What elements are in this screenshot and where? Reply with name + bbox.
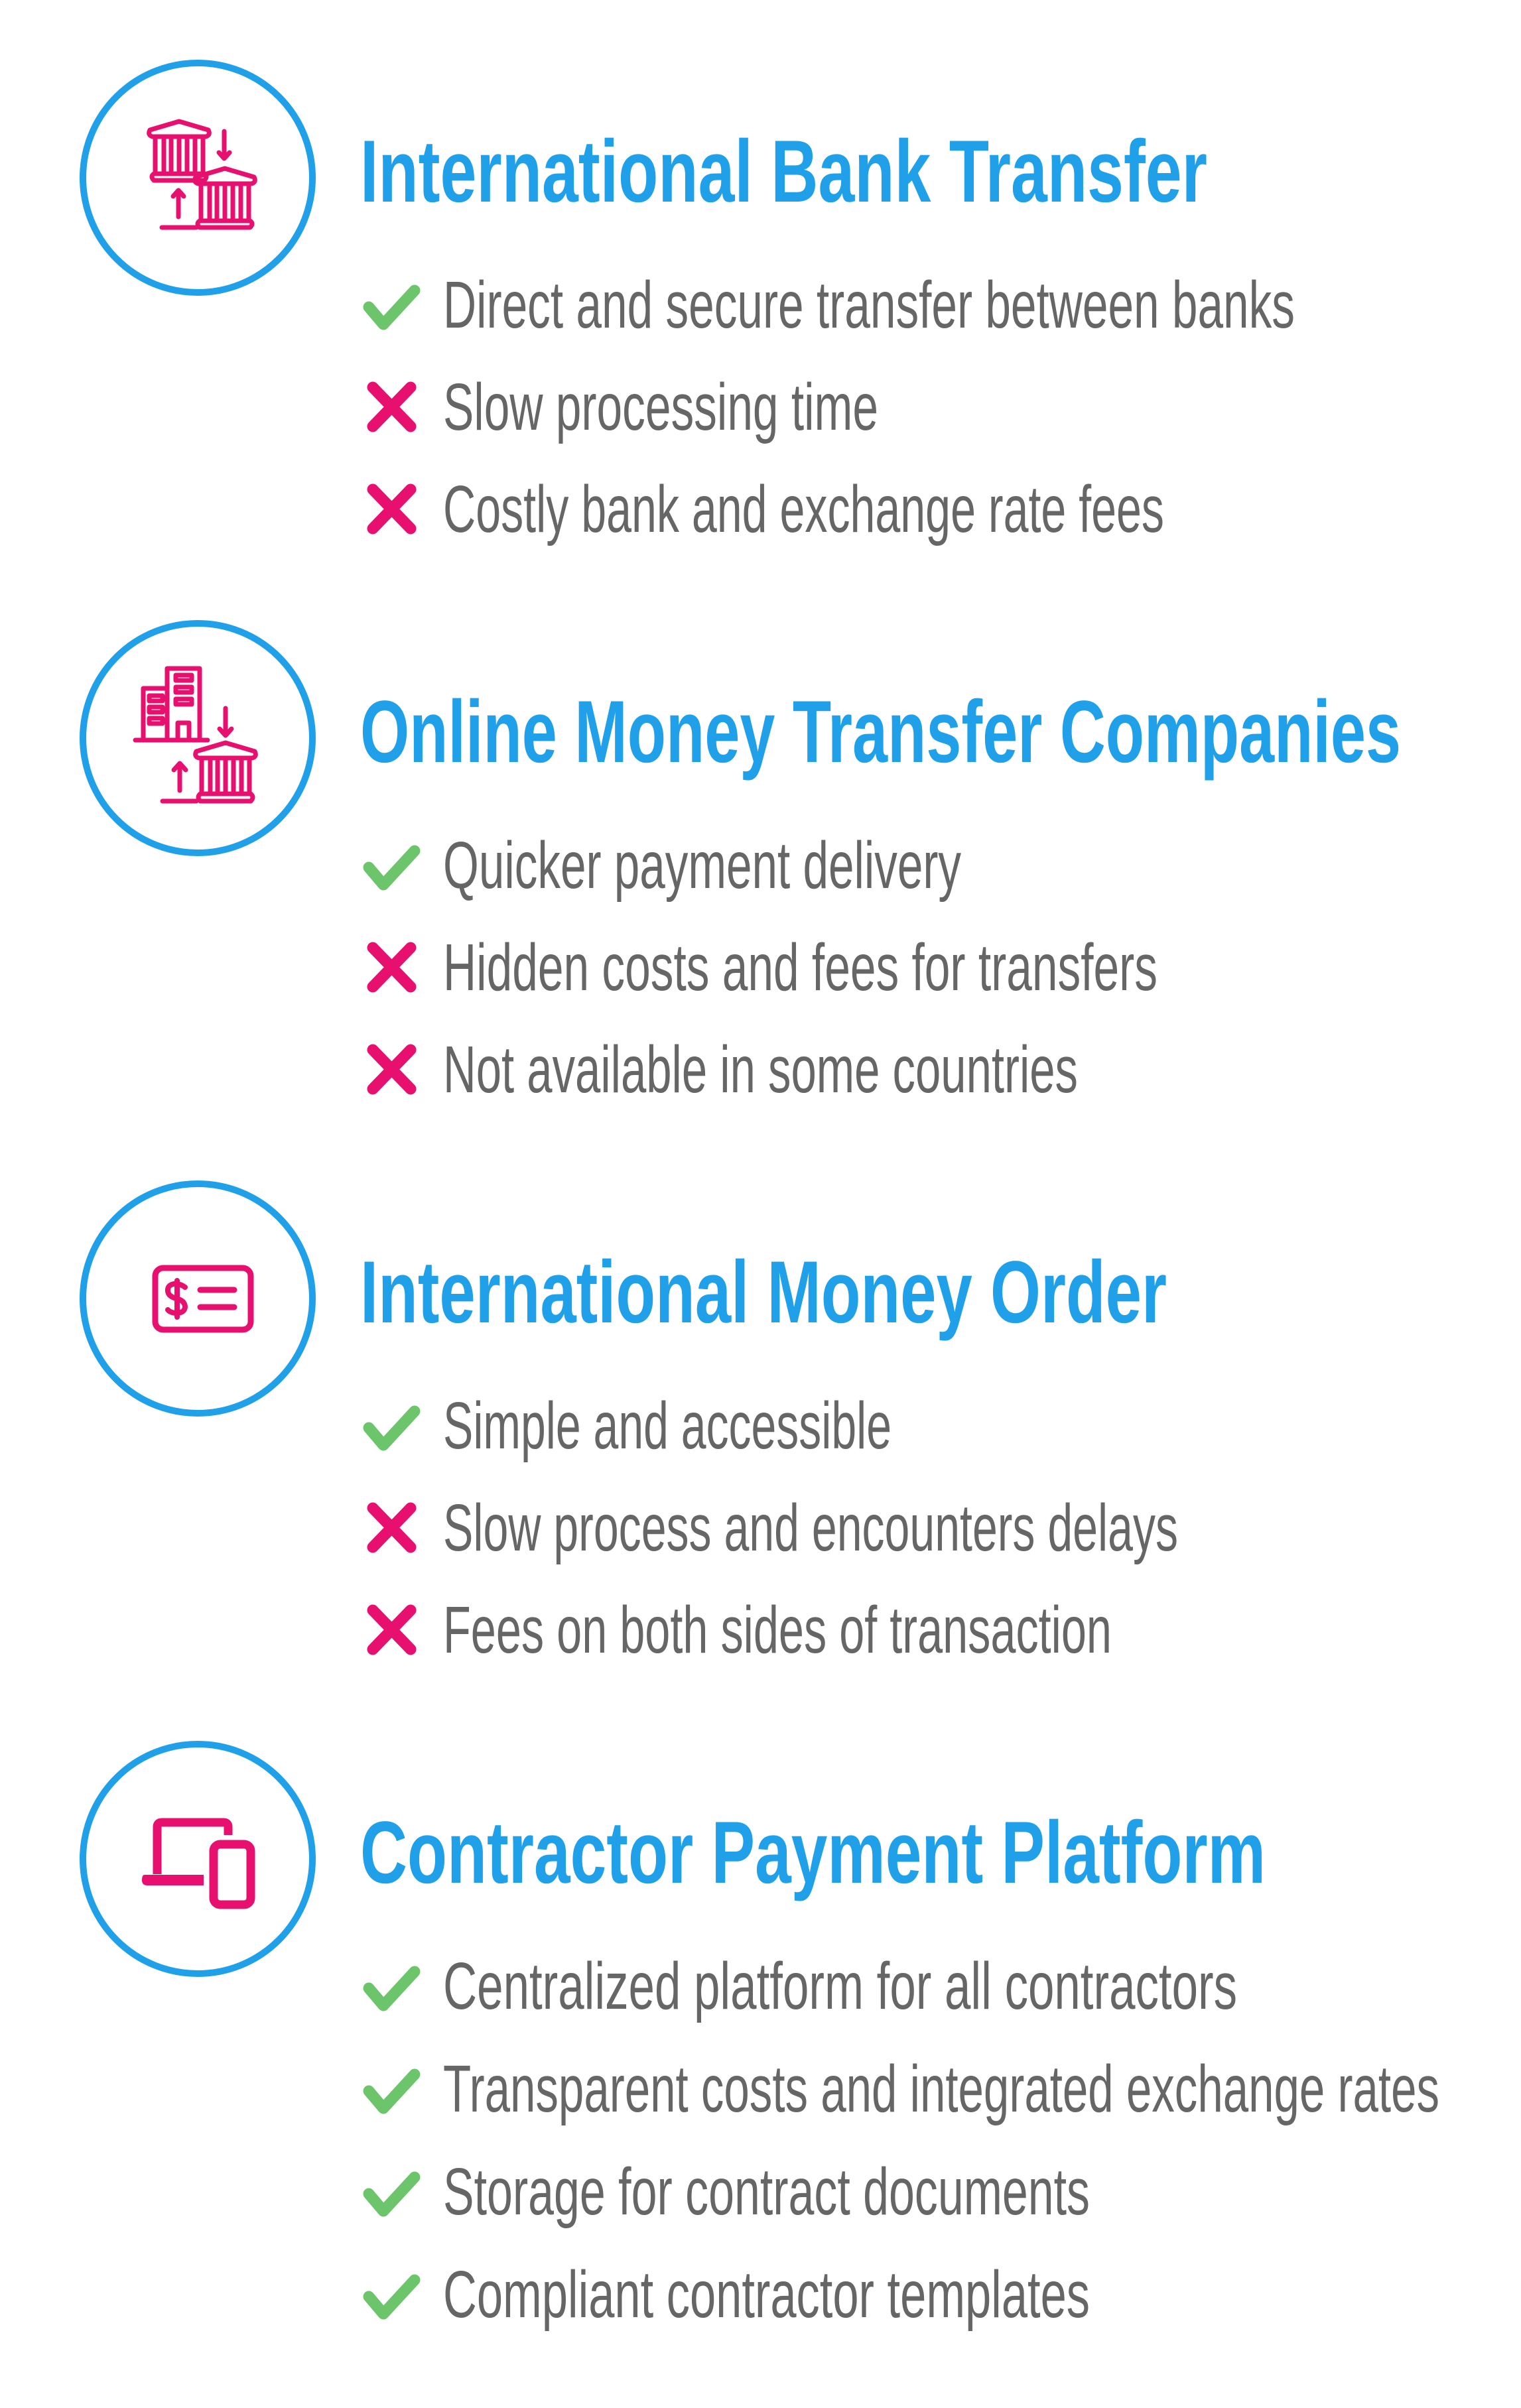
bullet list — [369, 1389, 1178, 1667]
bullet list — [369, 828, 1157, 1107]
icon circle: laptop and phone — [83, 1744, 312, 1974]
bullet list: Slow process and encounters delays — [443, 1491, 1178, 1565]
bullet list: Storage for contract documents — [443, 2155, 1090, 2229]
panel: online money transfer companies — [83, 623, 1401, 1107]
bullet list: Quicker payment delivery — [443, 828, 961, 903]
panel: contractor payment platform — [83, 1744, 1439, 2332]
bullet list: Fees on both sides of transaction — [443, 1593, 1112, 1667]
bullet list — [369, 268, 1295, 546]
title: International Money Order — [360, 1243, 1167, 1342]
bullet list: Hidden costs and fees for transfers — [443, 930, 1157, 1005]
icon circle: buildings and bank — [83, 623, 312, 853]
bullet list: Costly bank and exchange rate fees — [443, 472, 1164, 546]
icon circle: money order card — [83, 1184, 312, 1413]
bullet list: Slow processing time — [443, 370, 878, 444]
bullet list — [369, 1949, 1439, 2332]
panel: international bank transfer — [83, 63, 1295, 546]
bullet list: Not available in some countries — [443, 1033, 1078, 1107]
bullet list: Compliant contractor templates — [443, 2257, 1090, 2332]
icon circle: banks — [83, 63, 312, 292]
panel: international money order — [83, 1184, 1178, 1667]
bullet list: Simple and accessible — [443, 1389, 892, 1463]
title: International Bank Transfer — [360, 123, 1207, 221]
